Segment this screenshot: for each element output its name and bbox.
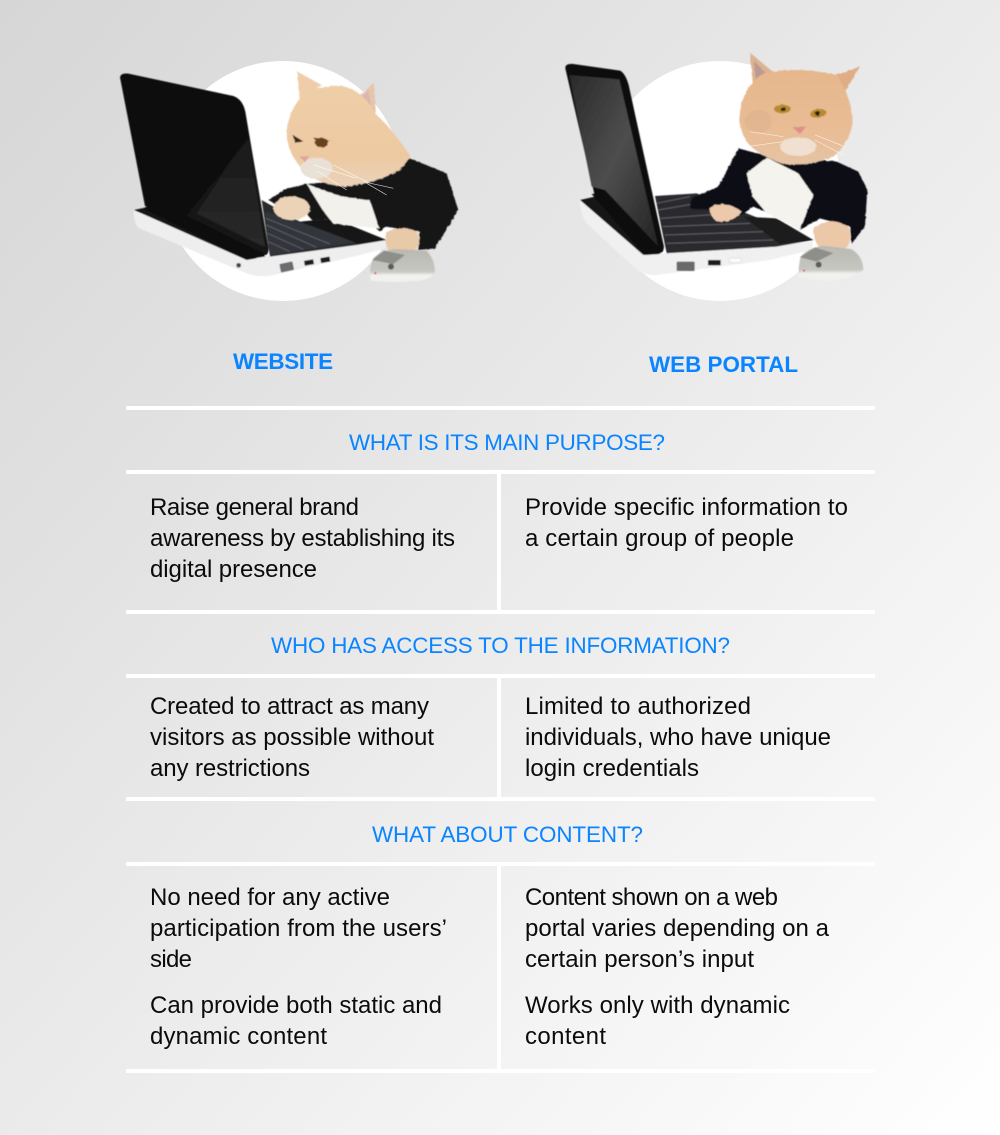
text: web portal access: [525, 693, 831, 782]
text: website access: Created to attract as many: [150, 693, 429, 720]
text: website content: side: [150, 946, 192, 973]
laptop: [565, 64, 813, 275]
text: website access: [150, 693, 434, 782]
text: web portal content: Works only with dynamic: [525, 992, 790, 1019]
cat in sweater: [690, 53, 867, 253]
white circle backdrop: [163, 61, 403, 301]
text: web portal access: login credentials: [525, 755, 699, 782]
illustration: cat at laptop, website: [120, 61, 458, 301]
toy mouse: [370, 249, 435, 282]
text: website purpose: Raise general brand: [150, 494, 359, 521]
whiskers: [747, 132, 845, 155]
text: website content: [150, 884, 447, 1050]
heading: website: WEBSITE: [233, 349, 333, 374]
comparison table rules: [126, 406, 875, 1073]
text: web portal content: portal varies depending on a: [525, 915, 830, 942]
text: website purpose: awareness by establishing its: [150, 525, 455, 552]
text: web portal purpose: Provide specific information to: [525, 494, 848, 521]
illustration: cat at laptop, web portal: [565, 53, 867, 301]
section heading: content: WHAT ABOUT CONTENT?: [372, 822, 643, 847]
text: web portal purpose: a certain group of people: [525, 525, 794, 552]
text: website access: any restrictions: [150, 755, 310, 782]
text: web portal content: certain person’s input: [525, 946, 754, 973]
text: web portal access: Limited to authorized: [525, 693, 751, 720]
text: web portal content: Content shown on a web: [525, 884, 778, 911]
text: website content: dynamic content: [150, 1023, 327, 1050]
text: website purpose: digital presence: [150, 556, 317, 583]
text: web portal content: content: [525, 1023, 606, 1050]
laptop: [120, 73, 387, 276]
text: website content: No need for any active: [150, 884, 390, 911]
toy mouse: [798, 246, 863, 281]
text: web portal access: individuals, who have unique: [525, 724, 831, 751]
cat in jacket: [268, 72, 458, 255]
section heading: main purpose: WHAT IS ITS MAIN PURPOSE?: [349, 430, 665, 455]
text: website content: Can provide both static and: [150, 992, 442, 1019]
whiskers: [313, 165, 393, 195]
section heading: access: WHO HAS ACCESS TO THE INFORMATION?: [271, 633, 730, 658]
text: web portal content: [525, 884, 830, 1050]
text: website purpose: [150, 494, 455, 583]
heading: web portal: WEB PORTAL: [649, 352, 798, 377]
text: website access: visitors as possible without: [150, 724, 434, 751]
text: website content: participation from the users’: [150, 915, 447, 942]
white circle backdrop: [600, 61, 840, 301]
text: web portal purpose: [525, 494, 848, 552]
